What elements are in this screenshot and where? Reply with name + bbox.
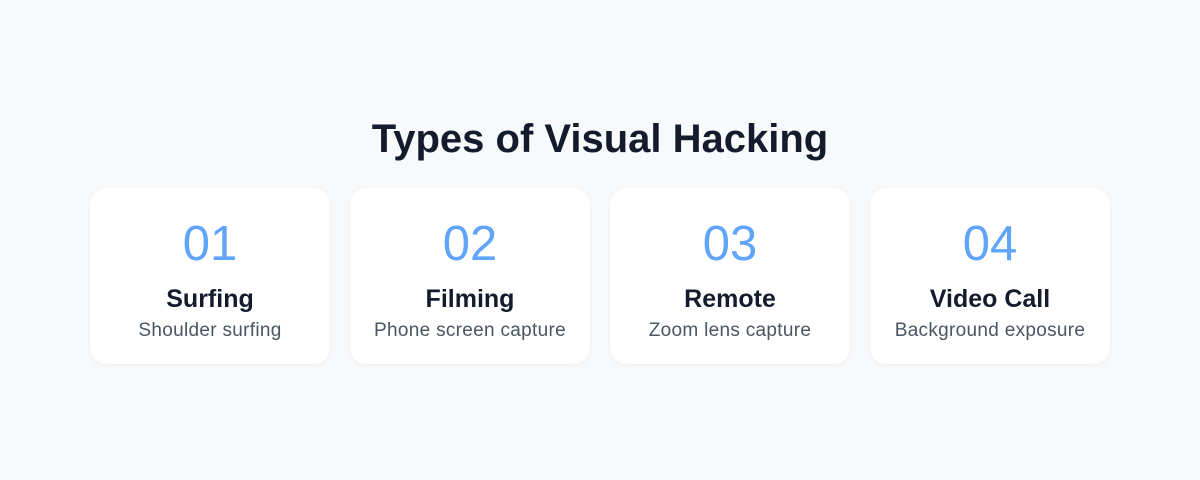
subtitle: Phone screen capture [374, 320, 566, 341]
card: filming [350, 188, 590, 364]
heading remote: Remote [684, 285, 776, 313]
card: surfing [90, 188, 330, 364]
number 01: 01 [183, 217, 237, 271]
subtitle: Background exposure [895, 320, 1085, 341]
card: remote [610, 188, 850, 364]
number 02: 02 [443, 217, 497, 271]
heading filming: Filming [426, 285, 514, 313]
title: Types of Visual Hacking [372, 117, 828, 161]
number 03: 03 [703, 217, 757, 271]
card: video call [870, 188, 1110, 364]
number 04: 04 [963, 217, 1017, 271]
subtitle: Zoom lens capture [649, 320, 811, 341]
subtitle: Shoulder surfing [138, 320, 282, 341]
heading surfing: Surfing [166, 285, 254, 313]
heading video call: Video Call [930, 285, 1050, 313]
